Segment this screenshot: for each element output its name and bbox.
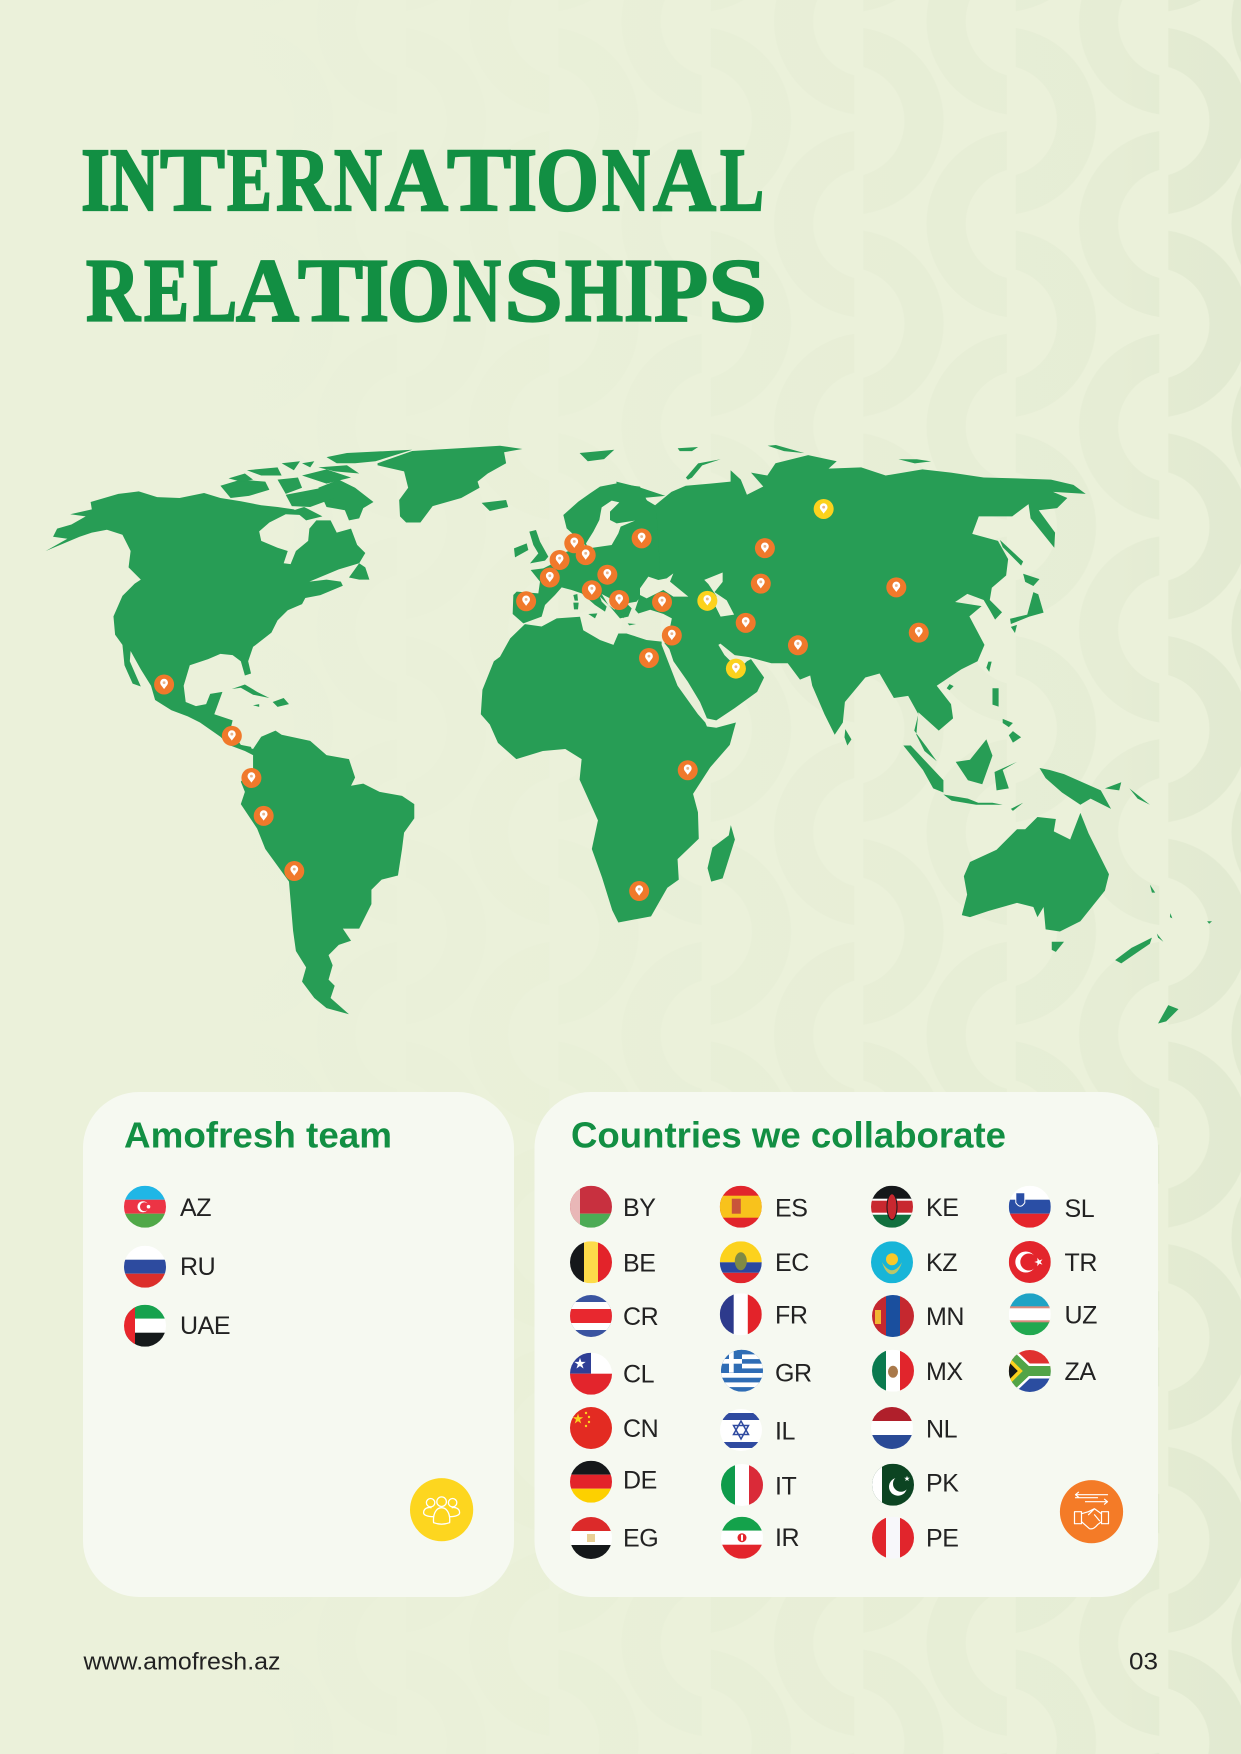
pin: Kenya	[678, 760, 698, 780]
country: CR: CR	[623, 1303, 658, 1331]
footer: page number: 03	[1129, 1648, 1158, 1676]
country: UZ	[1009, 1293, 1097, 1335]
country: MX	[872, 1350, 963, 1392]
country: UAE: UAE	[180, 1312, 230, 1340]
pin: South Africa	[629, 881, 649, 901]
country: MN: MN	[926, 1303, 964, 1331]
country: CR	[570, 1295, 658, 1337]
heading: Amofresh team: Amofresh team	[124, 1114, 392, 1156]
title: S	[504, 241, 563, 341]
country: PK	[872, 1464, 959, 1506]
pin: Peru	[254, 806, 274, 826]
pin: Mongolia	[886, 577, 906, 597]
pin: France	[540, 568, 560, 588]
pin: Italy	[582, 580, 602, 600]
country: KZ	[871, 1241, 957, 1283]
pin: Slovenia	[597, 565, 617, 585]
title: L	[193, 241, 237, 341]
pin: Belarus	[632, 528, 652, 548]
title: N	[453, 241, 501, 341]
title: T	[298, 241, 363, 341]
title: T	[447, 131, 511, 230]
footer: website: www.amofresh.az	[82, 1648, 281, 1676]
title	[81, 131, 767, 341]
country: NL: NL	[926, 1415, 958, 1443]
country: IL: IL	[775, 1417, 796, 1445]
pin: Costa Rica	[222, 726, 242, 746]
adriatic and aegean	[602, 594, 615, 610]
country: EG: EG	[623, 1525, 658, 1553]
country: IR	[721, 1517, 799, 1559]
pin: Pakistan	[788, 635, 808, 655]
title: S	[708, 241, 767, 341]
pin: UAE	[726, 659, 746, 679]
title: A	[236, 241, 299, 341]
pin: Chile	[284, 861, 304, 881]
country: PE	[872, 1517, 959, 1559]
country: IL	[720, 1409, 796, 1451]
country: ZA: ZA	[1064, 1358, 1096, 1386]
country: ES: ES	[775, 1195, 808, 1223]
country: IT: IT	[775, 1472, 797, 1500]
title: I	[624, 241, 653, 341]
pin: Ecuador	[241, 768, 261, 788]
title: R	[276, 131, 331, 230]
country: ZA	[1005, 1350, 1096, 1392]
country: AZ: AZ	[180, 1194, 211, 1222]
caspian sea	[704, 573, 734, 617]
pin: Egypt	[639, 648, 659, 668]
country: NL	[871, 1407, 958, 1449]
world map	[46, 445, 1212, 1023]
title: P	[654, 241, 708, 341]
country: SL: SL	[1064, 1195, 1095, 1223]
pin: Germany	[576, 545, 596, 565]
country: DE	[570, 1461, 657, 1503]
pin: Russia	[814, 499, 834, 519]
country: FR: FR	[775, 1301, 808, 1329]
country: EC	[720, 1241, 809, 1283]
pin: China	[909, 623, 929, 643]
pin: Mexico	[154, 674, 174, 694]
country: RU	[124, 1246, 215, 1288]
title: I	[81, 131, 110, 230]
country: UAE	[124, 1305, 230, 1347]
title: N	[602, 131, 650, 230]
country: KE	[871, 1186, 959, 1228]
panel: Amofresh team	[83, 1092, 514, 1597]
country: TR: TR	[1064, 1249, 1097, 1277]
map pins	[154, 499, 929, 901]
black sea	[640, 573, 688, 598]
pin: Netherlands	[564, 533, 584, 553]
pin: Azerbaijan	[697, 591, 717, 611]
pin: Turkey	[652, 592, 672, 612]
country: IT	[721, 1464, 797, 1506]
country: EG	[570, 1517, 658, 1559]
europe detail	[513, 483, 688, 625]
country: CL: CL	[623, 1361, 655, 1389]
pin: Israel	[662, 626, 682, 646]
country: UZ: UZ	[1064, 1301, 1097, 1329]
country: IR: IR	[775, 1524, 799, 1552]
heading: Countries we collaborate: Countries we collaborate	[571, 1114, 1006, 1156]
country: GR: GR	[775, 1359, 812, 1387]
country: PE: PE	[926, 1525, 959, 1553]
title: I	[508, 131, 537, 230]
country: SL	[1009, 1186, 1095, 1228]
icon: handshake	[1060, 1480, 1123, 1543]
country: KE: KE	[926, 1194, 959, 1222]
country: KZ: KZ	[926, 1249, 957, 1277]
country: MN	[872, 1295, 964, 1337]
title: I	[360, 241, 389, 341]
country: BY	[570, 1186, 656, 1228]
country: MX: MX	[926, 1358, 963, 1386]
pin: Kazakhstan	[755, 538, 775, 558]
title: N	[110, 131, 159, 230]
title: A	[385, 131, 448, 230]
title: T	[160, 131, 225, 230]
panel: Countries we collaborate	[534, 1092, 1158, 1597]
title: R	[86, 241, 141, 341]
title: N	[334, 131, 382, 230]
country: BE	[570, 1241, 656, 1283]
title: O	[387, 241, 450, 341]
country: FR	[720, 1293, 808, 1335]
title: E	[227, 131, 272, 230]
country: CN: CN	[623, 1415, 658, 1443]
icon: team	[410, 1478, 473, 1541]
country: CL	[570, 1353, 655, 1395]
pin: Uzbekistan	[751, 574, 771, 594]
pin: Spain	[516, 591, 536, 611]
country: CN	[570, 1407, 658, 1449]
country: ES	[720, 1186, 808, 1228]
title: E	[144, 241, 189, 341]
country: DE: DE	[623, 1466, 657, 1494]
country: PK: PK	[926, 1470, 959, 1498]
country: GR	[721, 1350, 812, 1392]
country: TR	[1009, 1241, 1097, 1283]
pin: Belgium	[550, 550, 570, 570]
baltic sea	[586, 501, 635, 548]
title: H	[565, 241, 623, 341]
country: RU: RU	[180, 1253, 215, 1281]
pin: Iran	[736, 613, 756, 633]
country: BY: BY	[623, 1194, 656, 1222]
title: L	[720, 131, 764, 230]
country: BE: BE	[623, 1250, 656, 1278]
pin: Greece	[609, 590, 629, 610]
country: EC: EC	[775, 1249, 809, 1277]
country: AZ	[124, 1186, 211, 1228]
title: A	[653, 131, 716, 230]
title: O	[536, 131, 599, 230]
